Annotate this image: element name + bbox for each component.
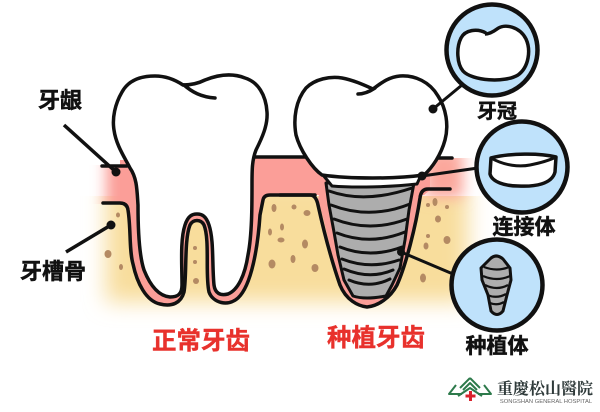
abutment	[323, 173, 422, 187]
implant crown	[295, 76, 447, 178]
dental implant socket	[280, 158, 452, 307]
icon: pine trees and red cross	[449, 378, 491, 401]
label: abutment: 连接体	[492, 216, 556, 239]
bone speckles	[104, 198, 450, 284]
label: crown: 牙冠	[477, 101, 517, 123]
label: alveolar bone: 牙槽骨	[20, 259, 86, 284]
hospital english name: SONGSHAN GENERAL HOSPITAL	[500, 399, 593, 405]
connector lines	[64, 85, 478, 274]
label: gum: 牙龈	[38, 88, 82, 113]
hospital logo	[449, 376, 593, 405]
callout circle: abutment	[476, 122, 568, 212]
label: natural tooth: 正常牙齿	[152, 327, 250, 355]
implant screw	[326, 183, 414, 298]
natural tooth socket	[102, 157, 315, 305]
natural tooth	[113, 75, 267, 297]
hospital name: 重慶松山醫院	[497, 376, 593, 399]
label: dental implant: 种植牙齿	[327, 324, 425, 352]
label: implant: 种植体	[466, 334, 528, 358]
callout circle: crown	[446, 4, 538, 96]
callout circle: implant	[452, 240, 542, 330]
bone and gum background	[106, 150, 468, 302]
